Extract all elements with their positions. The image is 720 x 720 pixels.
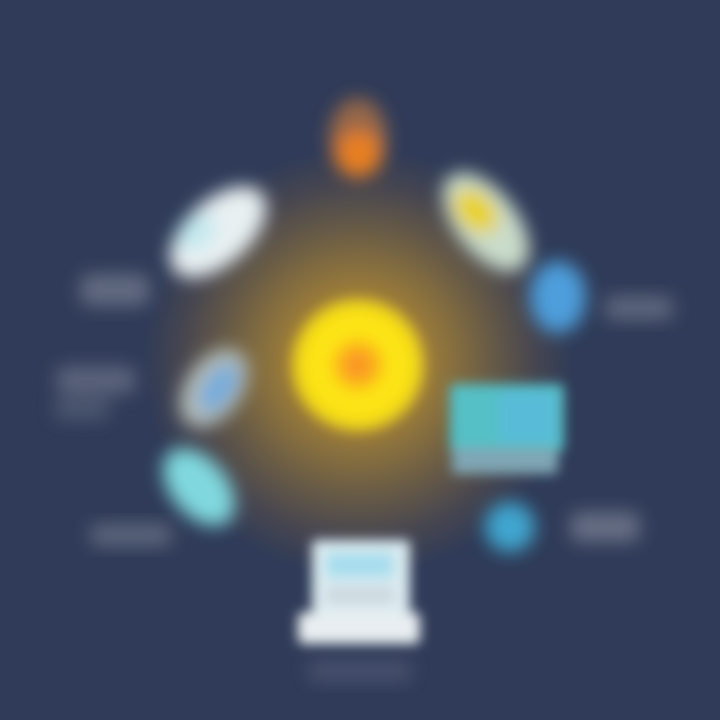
central sun icon <box>290 297 426 433</box>
icon: center-left blue leaf <box>166 336 262 440</box>
label: bottom <box>308 660 412 682</box>
label: left lower <box>90 524 172 546</box>
label: left middle <box>54 366 136 420</box>
icon: blue circle <box>530 261 586 333</box>
icon: lower-left teal leaf <box>149 435 249 539</box>
central glow <box>143 147 573 577</box>
icon: top orange badge <box>329 98 387 178</box>
label: right upper <box>604 296 674 320</box>
icon: monitor <box>450 384 564 474</box>
label: left upper <box>80 274 150 306</box>
icon: upper-left white leaf <box>153 169 283 295</box>
icon: upper-right yellow leaf <box>426 157 546 287</box>
icon: teal circle <box>485 502 535 552</box>
icon: laptop <box>298 540 420 644</box>
label: right lower <box>570 512 640 542</box>
